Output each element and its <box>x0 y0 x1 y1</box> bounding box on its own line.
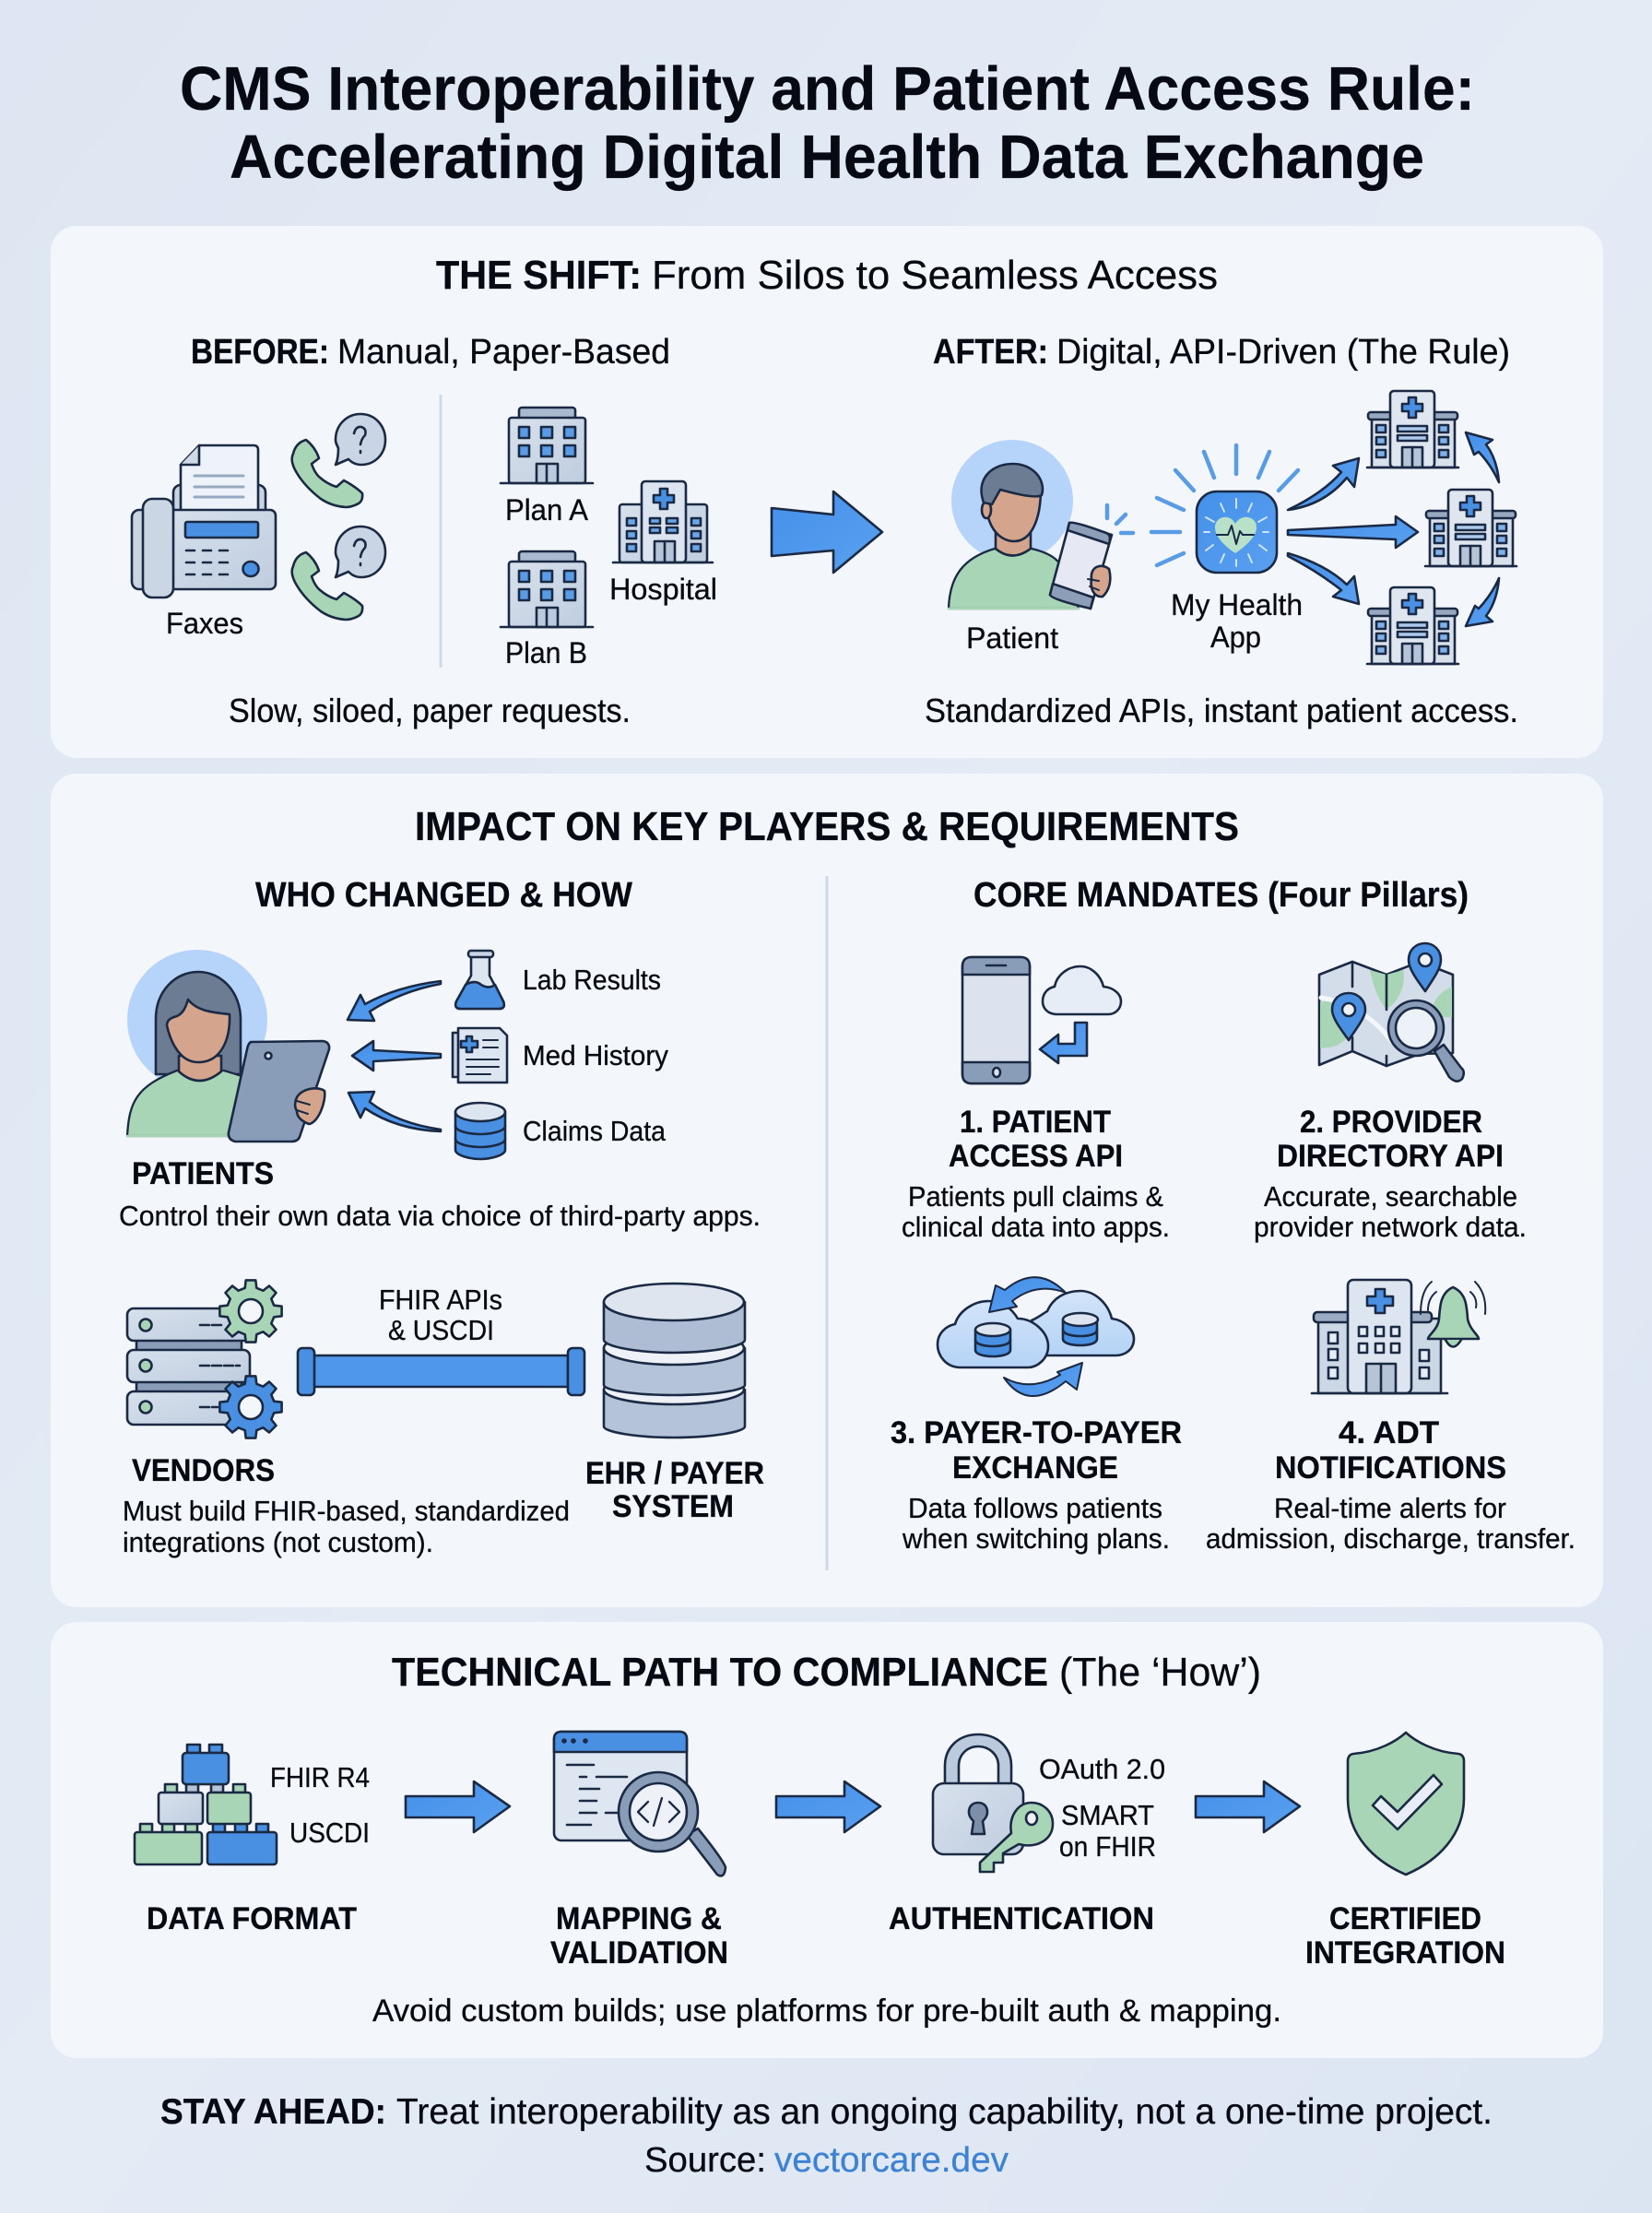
text: description 4: Real-time alerts for <box>1274 1492 1506 1524</box>
label: data format: DATA FORMAT <box>147 1901 357 1936</box>
text: description 3 <box>902 1492 1170 1555</box>
label: SMART on FHIR: SMART <box>1061 1799 1154 1831</box>
heading: who changed: WHO CHANGED & HOW <box>255 876 632 915</box>
icon: data format blocks <box>135 1745 277 1864</box>
icon: flask <box>455 951 504 1009</box>
caption: before: Slow, siloed, paper requests. <box>229 692 631 729</box>
text: description 2: provider network data. <box>1254 1211 1527 1243</box>
heading: impact: IMPACT ON KEY PLAYERS & REQUIREMENTS <box>415 804 1239 849</box>
pillar 4: ADT notifications <box>1206 1280 1575 1555</box>
text: description 1: Patients pull claims & <box>908 1180 1163 1213</box>
label: med history: Med History <box>523 1039 668 1071</box>
icon: plan B building <box>501 551 593 627</box>
caption: after: Standardized APIs, instant patient access. <box>925 692 1518 729</box>
label: SMART on FHIR <box>1059 1799 1156 1863</box>
label: SMART on FHIR: on FHIR <box>1059 1830 1156 1863</box>
text: title 4 <box>1275 1415 1506 1485</box>
subheading: before: BEFORE: <box>191 333 329 372</box>
subheading: after: AFTER: <box>933 333 1048 372</box>
icon: hospital <box>613 481 713 562</box>
label: EHR payer system <box>585 1456 764 1524</box>
footer: stay ahead: Treat interoperability as an ongoing capability, not a one-time project. <box>396 2092 1493 2132</box>
icon: woman with tablet <box>127 950 329 1142</box>
text: title 1 <box>949 1105 1123 1174</box>
label: hospital: Hospital <box>609 573 717 606</box>
label: claims data: Claims Data <box>523 1115 667 1147</box>
label: mapping and validation <box>550 1901 728 1970</box>
text: patients description: Control their own data via choice of third-party apps. <box>119 1200 761 1232</box>
subheading: before: Manual, Paper-Based <box>337 333 670 372</box>
icon: clouds exchanging data <box>938 1277 1134 1396</box>
arrows: app to hospitals <box>1288 432 1499 626</box>
panel: technical path to compliance <box>51 1622 1603 2058</box>
icon: lock and key <box>933 1734 1053 1872</box>
text: vendors description <box>123 1495 570 1558</box>
icon: my health app <box>1197 491 1277 573</box>
title: Accelerating Digital Health Data Exchange <box>230 123 1424 192</box>
label: plan A: Plan A <box>505 493 589 527</box>
panel: the shift <box>51 226 1603 758</box>
label: vendors: VENDORS <box>132 1453 275 1488</box>
text: title 2: DIRECTORY API <box>1277 1139 1504 1174</box>
caption: avoid custom builds: Avoid custom builds; use platforms for pre-built auth & mapping. <box>372 1994 1281 2029</box>
text: description 3: when switching plans. <box>902 1522 1170 1555</box>
text: description 1: clinical data into apps. <box>902 1211 1170 1243</box>
arrow: step 2 to 3 <box>776 1781 880 1832</box>
footer: stay ahead: STAY AHEAD: <box>160 2092 386 2132</box>
icon: map with pins and magnifier <box>1319 943 1464 1082</box>
footer: source: vectorcare.dev <box>774 2141 1009 2180</box>
icon: phone with question 2 <box>292 527 385 620</box>
icon: hospital with bell <box>1312 1280 1485 1393</box>
title <box>180 54 1475 192</box>
arrows: data into patient <box>348 981 441 1131</box>
pillar 2: provider directory API <box>1254 943 1527 1243</box>
label: patients: PATIENTS <box>132 1156 274 1191</box>
icon: code window with magnifier <box>554 1732 726 1876</box>
arrow: step 3 to 4 <box>1196 1781 1300 1832</box>
label: USCDI: USCDI <box>289 1817 370 1849</box>
icon: certified shield <box>1348 1733 1464 1875</box>
label: certified integration <box>1305 1901 1505 1970</box>
text: title 4: NOTIFICATIONS <box>1275 1450 1506 1485</box>
label: FHIR APIs and USCDI: FHIR APIs <box>379 1284 502 1316</box>
text: description 2 <box>1254 1180 1527 1243</box>
panel: impact on key players <box>51 774 1603 1607</box>
icon: phone to cloud <box>962 957 1121 1083</box>
icon: FHIR pipe connector <box>298 1348 584 1395</box>
icon: large database <box>604 1284 745 1438</box>
label: faxes: Faxes <box>166 607 243 640</box>
label: my health app <box>1171 588 1303 654</box>
icon: plan A building <box>501 408 593 483</box>
text: title 2: 2. PROVIDER <box>1300 1105 1482 1140</box>
footer: source: Source: <box>644 2141 766 2180</box>
text: description 4 <box>1206 1492 1575 1555</box>
label: certified integration: CERTIFIED <box>1329 1901 1481 1936</box>
footer: source <box>644 2141 1009 2180</box>
subheading: before <box>191 333 670 372</box>
label: my health app: App <box>1210 621 1261 654</box>
text: title 3: 3. PAYER-TO-PAYER <box>891 1415 1182 1450</box>
label: lab results: Lab Results <box>523 964 661 996</box>
text: title 3: EXCHANGE <box>952 1450 1118 1485</box>
label: plan B: Plan B <box>505 636 587 669</box>
heading: the shift: From Silos to Seamless Access <box>652 253 1218 298</box>
icon: database <box>455 1103 505 1159</box>
label: mapping and validation: VALIDATION <box>550 1935 728 1970</box>
label: authentication: AUTHENTICATION <box>889 1901 1154 1936</box>
icon: hospital middle <box>1425 490 1516 566</box>
text: title 1: 1. PATIENT <box>960 1105 1111 1140</box>
text: description 2: Accurate, searchable <box>1264 1180 1517 1213</box>
icon: patient with phone <box>949 440 1112 609</box>
icon: medical history document <box>453 1028 507 1083</box>
title: CMS Interoperability and Patient Access Rule: <box>180 54 1475 124</box>
label: EHR payer system: SYSTEM <box>612 1489 734 1524</box>
label: FHIR R4: FHIR R4 <box>270 1761 370 1793</box>
text: vendors description: integrations (not custom). <box>123 1526 433 1558</box>
icon: vendor servers with gears <box>127 1280 282 1438</box>
label: EHR payer system: EHR / PAYER <box>585 1456 764 1491</box>
label: FHIR APIs and USCDI <box>379 1284 502 1346</box>
text: description 4: admission, discharge, transfer. <box>1206 1522 1575 1555</box>
label: certified integration: INTEGRATION <box>1305 1935 1505 1970</box>
subheading: after: Digital, API-Driven (The Rule) <box>1056 333 1510 372</box>
label: patient: Patient <box>966 621 1058 655</box>
label: my health app: My Health <box>1171 588 1303 621</box>
text: description 3: Data follows patients <box>908 1492 1162 1524</box>
text: description 1 <box>902 1180 1170 1243</box>
text: title 3 <box>891 1415 1182 1485</box>
pillar 3: payer-to-payer exchange <box>891 1277 1182 1555</box>
arrow: before to after <box>772 491 882 573</box>
heading: core mandates: CORE MANDATES (Four Pillars) <box>974 876 1469 915</box>
icon: hospital bottom <box>1367 587 1458 664</box>
label: mapping and validation: MAPPING & <box>556 1901 722 1936</box>
text: title 1: ACCESS API <box>949 1139 1123 1174</box>
label: OAuth 2.0: OAuth 2.0 <box>1039 1753 1165 1785</box>
text: vendors description: Must build FHIR-based, standardized <box>123 1495 570 1527</box>
text: title 2 <box>1277 1105 1504 1174</box>
heading: the shift: THE SHIFT: <box>436 253 642 298</box>
text: title 4: 4. ADT <box>1339 1415 1439 1450</box>
pillar 1: patient access API <box>902 957 1170 1243</box>
arrow: step 1 to 2 <box>406 1781 510 1832</box>
heading: technical path: (The ‘How’) <box>1059 1650 1261 1695</box>
heading: technical path: TECHNICAL PATH TO COMPLIANCE <box>392 1650 1048 1695</box>
icon: fax machine <box>132 445 276 598</box>
label: FHIR APIs and USCDI: & USCDI <box>388 1314 494 1346</box>
icon: phone with question 1 <box>292 414 385 507</box>
icon: hospital top <box>1367 391 1458 467</box>
signal lines <box>1107 445 1298 565</box>
